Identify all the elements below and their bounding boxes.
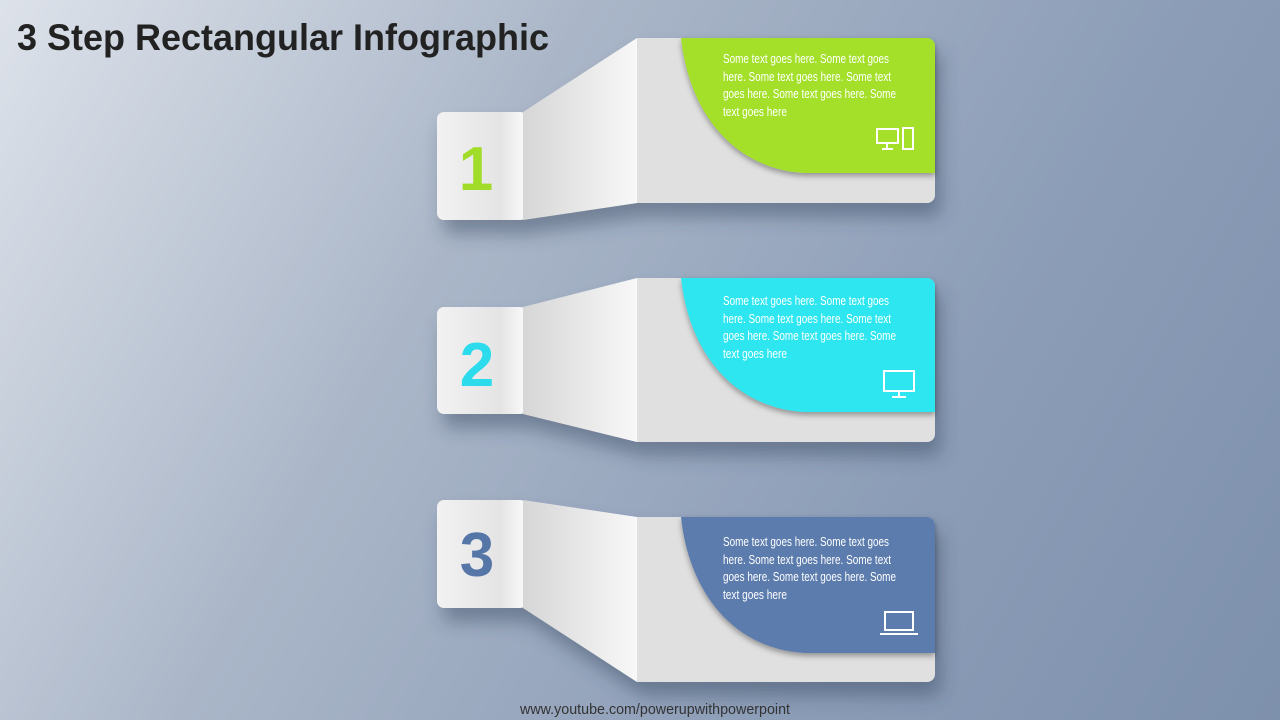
text 3: here. Some text goes here. Some text bbox=[723, 553, 891, 567]
text 2: here. Some text goes here. Some text bbox=[723, 312, 891, 326]
tab 2 bbox=[437, 307, 527, 414]
text 3: Some text goes here. Some text goes bbox=[723, 535, 889, 549]
icon: desktop computer bbox=[877, 128, 913, 149]
tab 1 bbox=[437, 112, 527, 220]
number 1: 1 bbox=[459, 135, 493, 204]
colored panel 3 bbox=[681, 517, 935, 653]
text 1: Some text goes here. Some text goes bbox=[723, 52, 889, 66]
text 2: Some text goes here. Some text goes bbox=[723, 294, 889, 308]
number 3: 3 bbox=[460, 521, 494, 590]
fold 3 bbox=[523, 500, 637, 682]
text 2: goes here. Some text goes here. Some bbox=[723, 329, 896, 343]
fold 2 bbox=[523, 278, 637, 442]
text 1: here. Some text goes here. Some text bbox=[723, 70, 891, 84]
tab 3 bbox=[437, 500, 527, 608]
icon: laptop bbox=[880, 612, 918, 634]
text 1: text goes here bbox=[723, 105, 787, 119]
step 1 bbox=[437, 38, 935, 220]
colored panel 1 bbox=[681, 38, 935, 173]
step 3 bbox=[437, 500, 935, 682]
number 2: 2 bbox=[460, 331, 494, 400]
icon: monitor bbox=[884, 371, 914, 397]
title: 3 Step Rectangular Infographic bbox=[17, 17, 549, 58]
text 3: goes here. Some text goes here. Some bbox=[723, 570, 896, 584]
footer url: www.youtube.com/powerupwithpowerpoint bbox=[519, 701, 791, 718]
card 1 bbox=[637, 38, 935, 203]
text 2: text goes here bbox=[723, 347, 787, 361]
fold 1 bbox=[523, 38, 637, 220]
text 1: goes here. Some text goes here. Some bbox=[723, 87, 896, 101]
text 3: text goes here bbox=[723, 588, 787, 602]
card 3 bbox=[637, 517, 935, 682]
colored panel 2 bbox=[681, 278, 935, 412]
step 2 bbox=[437, 278, 935, 442]
card 2 bbox=[637, 278, 935, 442]
